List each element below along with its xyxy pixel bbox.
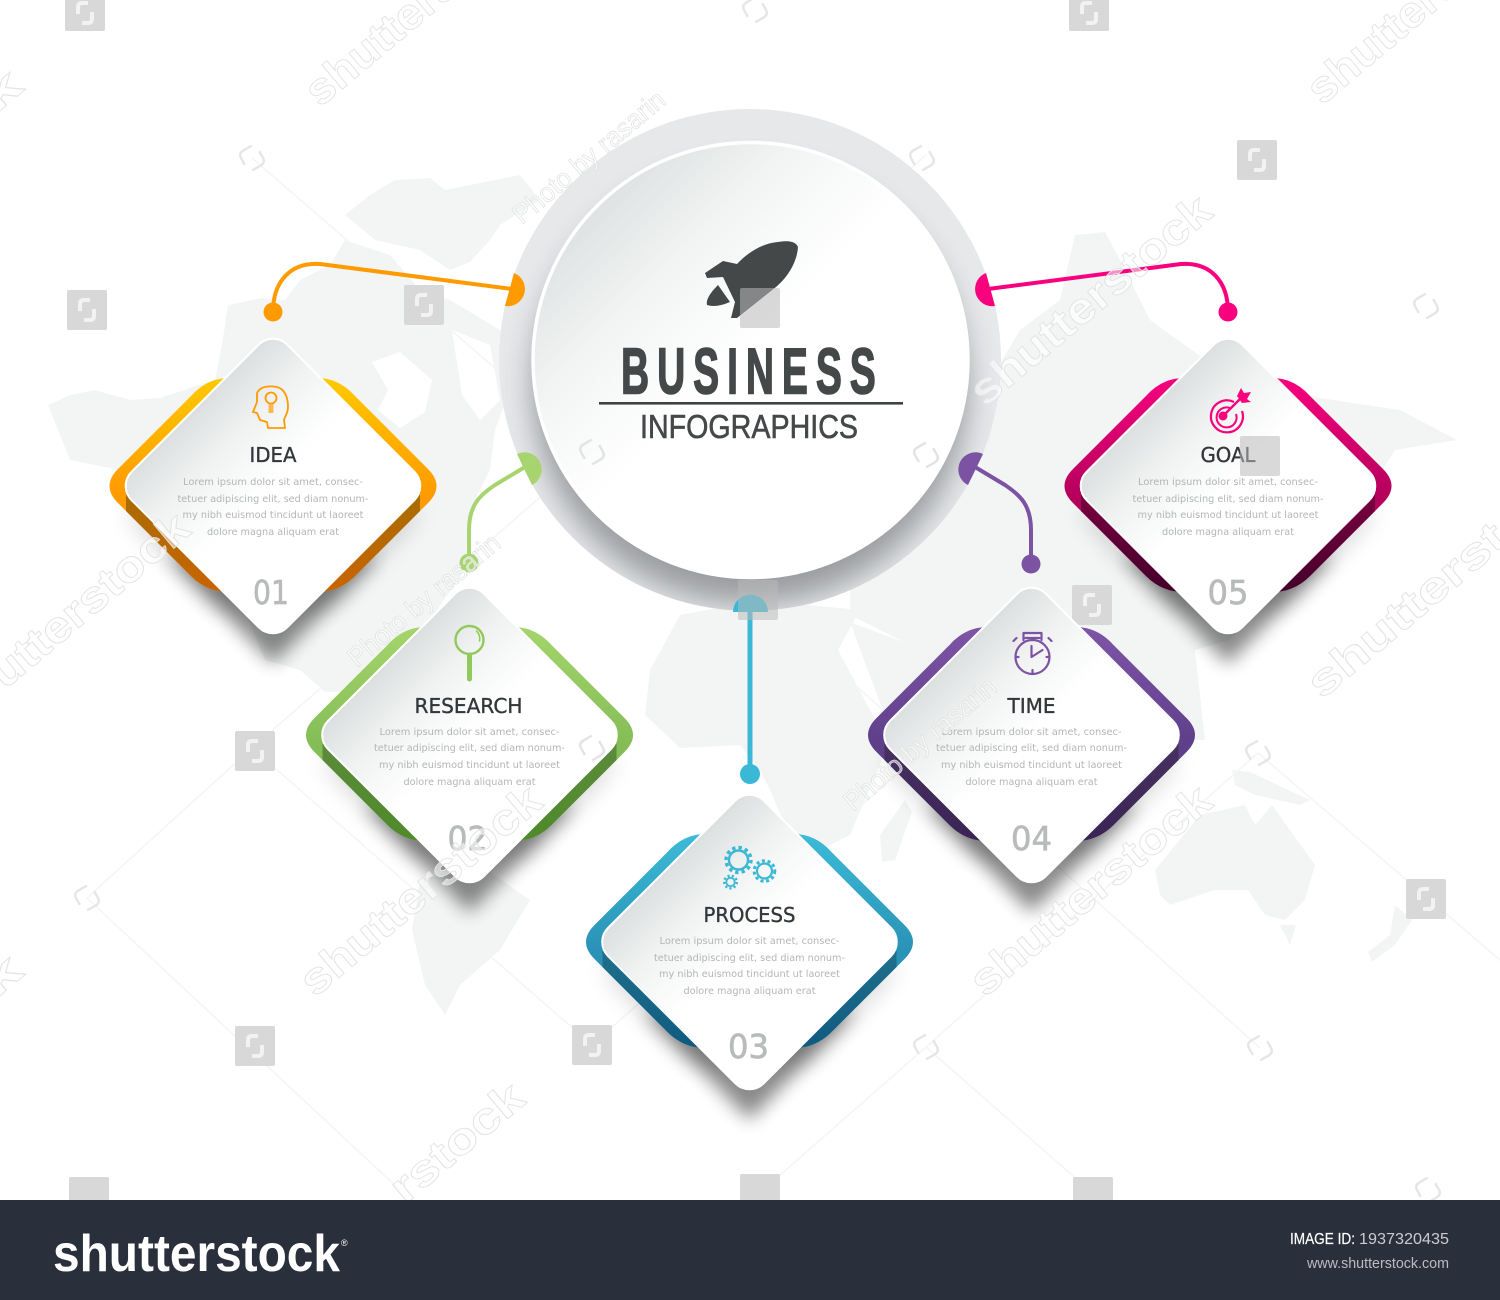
heading: TIME [1007, 694, 1056, 718]
outline icons over the artwork [578, 438, 940, 762]
map: Africa and Europe [645, 600, 882, 860]
body text: dolore magna aliquam erat [404, 777, 536, 788]
body text: tetuer adipiscing elit, sed diam nonum- [1132, 494, 1324, 505]
world map background [48, 175, 1457, 1015]
registered mark: ® [341, 1238, 348, 1248]
colored backing band [868, 627, 1195, 841]
connector 04 purple [958, 452, 1040, 574]
card 03 PROCESS [586, 786, 913, 1120]
body text: my nibh euismod tincidunt ut laoreet [379, 760, 560, 771]
heading: RESEARCH [414, 694, 522, 718]
body text [654, 936, 845, 997]
ring shadow [532, 168, 968, 604]
photographer credit marks [342, 84, 1002, 817]
body text: dolore magna aliquam erat [684, 986, 816, 997]
body text: my nibh euismod tincidunt ut laoreet [1138, 510, 1319, 521]
colored backing band [586, 834, 913, 1048]
icon: rocket [705, 241, 798, 318]
card 05 GOAL [1064, 330, 1392, 664]
icon: target with arrow [1211, 388, 1251, 432]
body text: Lorem ipsum dolor sit amet, consec- [1138, 477, 1318, 488]
connector 02 green [460, 452, 542, 572]
diamond card [117, 330, 429, 642]
card shadow [1078, 511, 1378, 664]
body text: dolore magna aliquam erat [966, 777, 1098, 788]
card 01 IDEA [110, 330, 436, 664]
subtitle: INFOGRAPHICS: INFOGRAPHICS [640, 409, 858, 446]
connector 05 pink [975, 264, 1238, 322]
number: 05 [1208, 573, 1248, 612]
card 02 RESEARCH [306, 579, 633, 913]
title rule [599, 402, 903, 405]
diamond card [594, 786, 905, 1098]
footer bar [0, 1200, 1500, 1300]
map: Asia [850, 232, 1457, 740]
connector 03 blue [733, 594, 768, 784]
image id label: IMAGE ID: [1290, 1231, 1355, 1248]
title: BUSINESS: BUSINESS [621, 335, 884, 408]
number: 02 [448, 819, 488, 858]
image id value: 1937320435 [1359, 1231, 1449, 1248]
photographer credit marks: Photo by rasarin [507, 84, 671, 230]
shutterstock text marks: shutterst [1297, 512, 1500, 708]
number: 04 [1011, 819, 1052, 858]
body text [374, 727, 565, 788]
shutterstock text marks: shutterstock [960, 185, 1222, 416]
outer ring [499, 109, 1001, 611]
number: 03 [728, 1027, 769, 1066]
inner disc [533, 142, 968, 578]
colored backing band [110, 378, 436, 592]
body text [178, 477, 368, 538]
diamond card [1072, 330, 1384, 642]
colored backing band [306, 627, 633, 841]
shutterstock text marks: shutterstock [290, 775, 552, 1006]
body text: Lorem ipsum dolor sit amet, consec- [183, 477, 363, 488]
shutterstock text marks: rstock [380, 1072, 534, 1213]
photographer credit marks: Photo by rasarin [838, 671, 1002, 817]
url: www.shutterstock.com [1306, 1256, 1449, 1272]
heading: IDEA [250, 443, 297, 467]
card shadow [123, 511, 423, 664]
number: 01 [253, 573, 289, 612]
body text: my nibh euismod tincidunt ut laoreet [941, 760, 1122, 771]
map: Arabia [850, 622, 965, 765]
body text [936, 727, 1127, 788]
map: Alaska and western Canada [48, 240, 510, 692]
card shadow [320, 760, 620, 913]
heading: GOAL [1200, 443, 1256, 467]
map: Madagascar [880, 800, 912, 862]
body text: Lorem ipsum dolor sit amet, consec- [942, 727, 1122, 738]
body text: tetuer adipiscing elit, sed diam nonum- [936, 743, 1127, 754]
card shadow [882, 760, 1182, 913]
body text: Lorem ipsum dolor sit amet, consec- [660, 936, 840, 947]
body text: tetuer adipiscing elit, sed diam nonum- [654, 953, 845, 964]
map: South America [412, 865, 530, 1015]
icon: gears [724, 848, 775, 888]
icon: head with light bulb [253, 386, 288, 428]
semi-transparent icon squares over artwork [738, 288, 1280, 620]
map: Indonesia [1232, 770, 1310, 805]
diamond card [314, 579, 625, 891]
map: New Zealand [1368, 905, 1412, 962]
diamond card [876, 579, 1187, 891]
footer logo: shutterstock [53, 1225, 340, 1283]
body text: tetuer adipiscing elit, sed diam nonum- [178, 494, 368, 505]
body text: dolore magna aliquam erat [1162, 527, 1294, 538]
body text: Lorem ipsum dolor sit amet, consec- [380, 727, 560, 738]
connector 01 orange [264, 264, 525, 322]
map: Hudson Bay cutout [372, 352, 432, 428]
colored backing band [1064, 378, 1392, 592]
body text: my nibh euismod tincidunt ut laoreet [182, 510, 364, 521]
map: Greenland [345, 175, 540, 270]
map: Tasmania [1280, 925, 1296, 945]
icon: stopwatch [1014, 633, 1052, 674]
body text: my nibh euismod tincidunt ut laoreet [659, 969, 840, 980]
map: Labrador cutout [452, 330, 500, 420]
body text: tetuer adipiscing elit, sed diam nonum- [374, 743, 565, 754]
card shadow [600, 967, 900, 1120]
card 04 TIME [868, 579, 1195, 913]
photographer credit marks: Photo by rasarin [342, 527, 506, 673]
map: Australia [1155, 805, 1315, 920]
body text: dolore magna aliquam erat [207, 527, 339, 538]
icon: magnifying glass [456, 626, 484, 679]
heading: PROCESS [704, 903, 796, 927]
body text [1132, 477, 1324, 538]
shutterstock text marks: shutterstock [960, 775, 1222, 1006]
center circle with ring [499, 109, 1001, 611]
